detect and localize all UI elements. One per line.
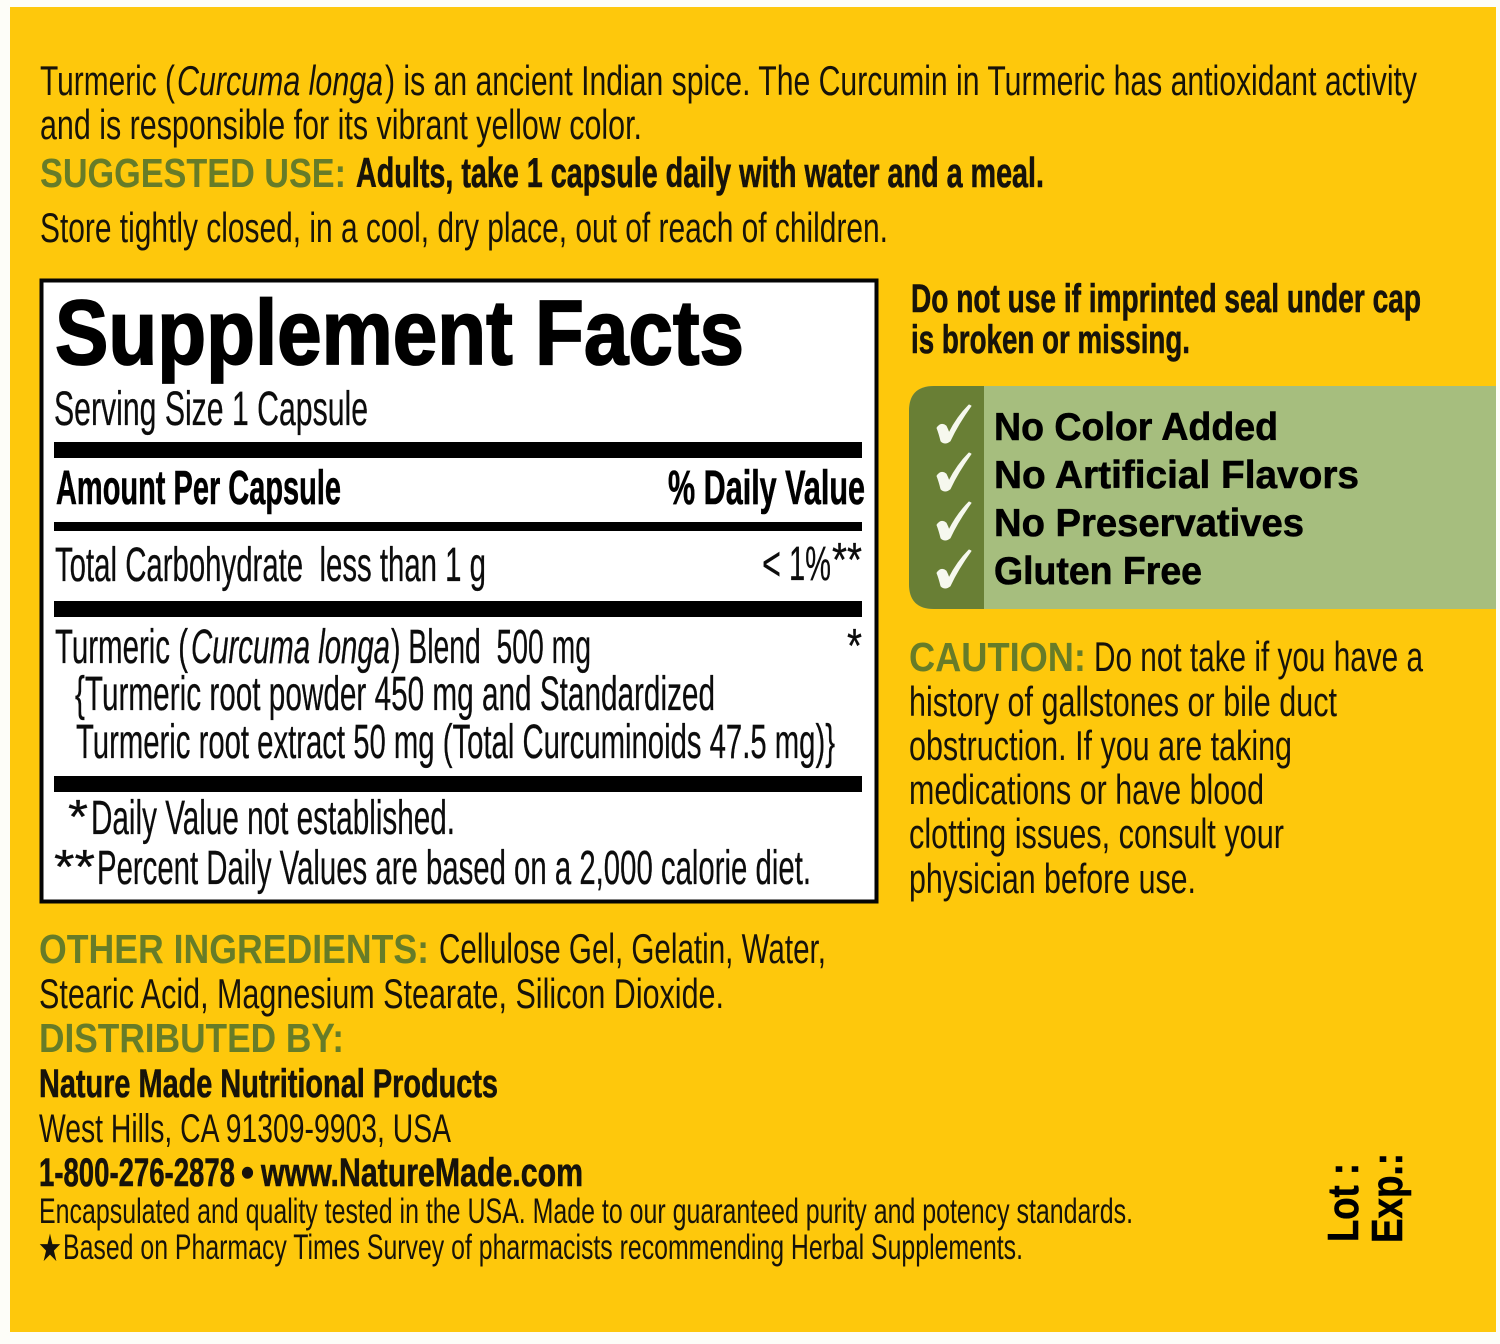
icon: check mark <box>937 453 971 491</box>
caution block: history of gallstones or bile duct <box>909 678 1337 725</box>
caution block: medications or have blood <box>909 766 1264 813</box>
table header <box>56 462 865 515</box>
panel: supplement facts <box>42 280 876 902</box>
other ingredients: OTHER INGREDIENTS: <box>39 926 429 972</box>
row: turmeric blend: Turmeric root extract 50 mg (Total Curcuminoids 47.5 mg)} <box>76 716 835 769</box>
intro text block: Turmeric ( <box>40 57 175 104</box>
lot and expiry: Exp.: <box>1363 1153 1412 1243</box>
fine print: ★ <box>38 1228 62 1270</box>
claims list: Gluten Free <box>994 550 1202 593</box>
seal warning <box>911 277 1421 362</box>
distributor block <box>39 1015 583 1195</box>
claims list: No Artificial Flavors <box>994 454 1359 497</box>
table header: % Daily Value <box>668 462 865 515</box>
icon: check mark <box>937 502 971 540</box>
caution block: obstruction. If you are taking <box>909 722 1292 769</box>
fine print: Based on Pharmacy Times Survey of pharmacists recommending Herbal Supplements. <box>63 1228 1023 1267</box>
panel: free-from claims <box>909 386 1496 609</box>
suggested use <box>40 149 1044 196</box>
icon: check mark <box>937 405 971 443</box>
distributor block: 1-800-276-2878 <box>39 1151 235 1195</box>
distributor block: • <box>241 1151 254 1195</box>
lot and expiry <box>1319 1153 1412 1243</box>
row: turmeric blend: ) Blend 500 mg <box>391 621 591 674</box>
row: turmeric blend: Turmeric ( <box>55 621 188 674</box>
suggested use: SUGGESTED USE: <box>40 150 346 196</box>
other ingredients: Cellulose Gel, Gelatin, Water, <box>439 925 826 972</box>
footnotes: * <box>68 791 88 844</box>
claims list <box>994 406 1359 593</box>
footnotes: ** <box>54 841 95 894</box>
footnotes: Percent Daily Values are based on a 2,000 calorie diet. <box>97 842 811 895</box>
caution block <box>909 633 1423 902</box>
other ingredients: Stearic Acid, Magnesium Stearate, Silicon Dioxide. <box>39 970 724 1017</box>
serving size: Serving Size 1 Capsule <box>54 383 368 436</box>
intro text block: Curcuma longa <box>177 57 383 104</box>
row: turmeric blend: {Turmeric root powder 450 mg and Standardized <box>75 668 715 721</box>
footnotes: Daily Value not established. <box>91 792 455 845</box>
row: turmeric blend: * <box>847 620 862 673</box>
caution block: CAUTION: <box>909 634 1086 680</box>
row: turmeric blend <box>55 620 862 769</box>
claims list: No Color Added <box>994 406 1278 449</box>
suggested use: Adults, take 1 capsule daily with water and a meal. <box>356 149 1044 196</box>
storage instructions: Store tightly closed, in a cool, dry place, out of reach of children. <box>40 204 888 251</box>
row: total carbohydrate: < <box>762 538 781 591</box>
row: total carbohydrate: ** <box>832 534 862 587</box>
row: total carbohydrate: 1% <box>789 538 831 591</box>
footnotes <box>54 791 811 895</box>
distributor block: DISTRIBUTED BY: <box>39 1015 344 1061</box>
heading: supplement facts: Supplement Facts <box>55 282 744 384</box>
distributor block: www.NatureMade.com <box>260 1151 583 1195</box>
seal warning: is broken or missing. <box>911 318 1190 362</box>
distributor block: West Hills, CA 91309-9903, USA <box>39 1107 451 1151</box>
other ingredients <box>39 925 826 1017</box>
lot and expiry: Lot : <box>1319 1163 1368 1242</box>
row: turmeric blend: Curcuma longa <box>191 621 390 674</box>
intro text block: and is responsible for its vibrant yellow color. <box>40 101 642 148</box>
icon: check mark <box>937 550 971 588</box>
row: total carbohydrate: Total Carbohydrate less than 1 g <box>55 539 486 592</box>
claims list: No Preservatives <box>994 502 1304 545</box>
caution block: physician before use. <box>909 855 1196 902</box>
intro text block <box>40 57 1417 148</box>
distributor block: Nature Made Nutritional Products <box>39 1062 498 1106</box>
caution block: clotting issues, consult your <box>909 810 1284 857</box>
fine print <box>38 1192 1133 1270</box>
table header: Amount Per Capsule <box>56 462 341 515</box>
